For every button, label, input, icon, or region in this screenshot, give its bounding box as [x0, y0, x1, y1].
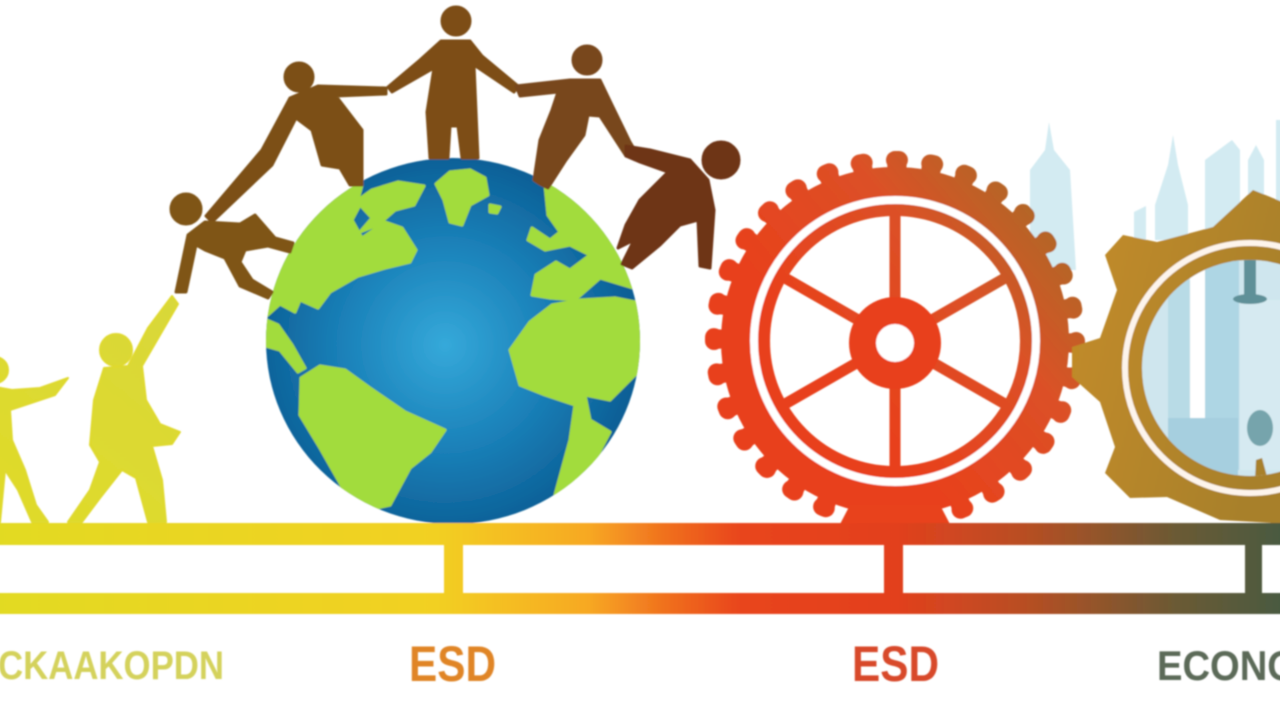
gear: economy wheel with city — [1072, 190, 1280, 524]
gear: red wheel — [714, 160, 1076, 528]
hub — [849, 297, 941, 389]
spokes — [785, 215, 1005, 470]
yellow figure reaching up — [68, 296, 180, 522]
label: left: CKAAKOPDN — [0, 644, 224, 688]
background skyline — [1030, 120, 1280, 270]
label: ESD orange: ESD — [409, 636, 496, 692]
figure: top centre — [388, 7, 518, 158]
continents — [262, 170, 650, 510]
far-left yellow figure — [0, 357, 68, 522]
figure: upper right — [516, 46, 636, 188]
people holding hands on the globe — [171, 7, 739, 298]
timeline bars — [0, 523, 1280, 614]
figure: right — [618, 142, 739, 268]
label: ESD red: ESD — [852, 636, 939, 692]
globe — [262, 158, 650, 524]
city inside wheel — [1168, 258, 1274, 477]
figure: upper left — [206, 63, 386, 222]
figure: lower left — [171, 194, 293, 298]
